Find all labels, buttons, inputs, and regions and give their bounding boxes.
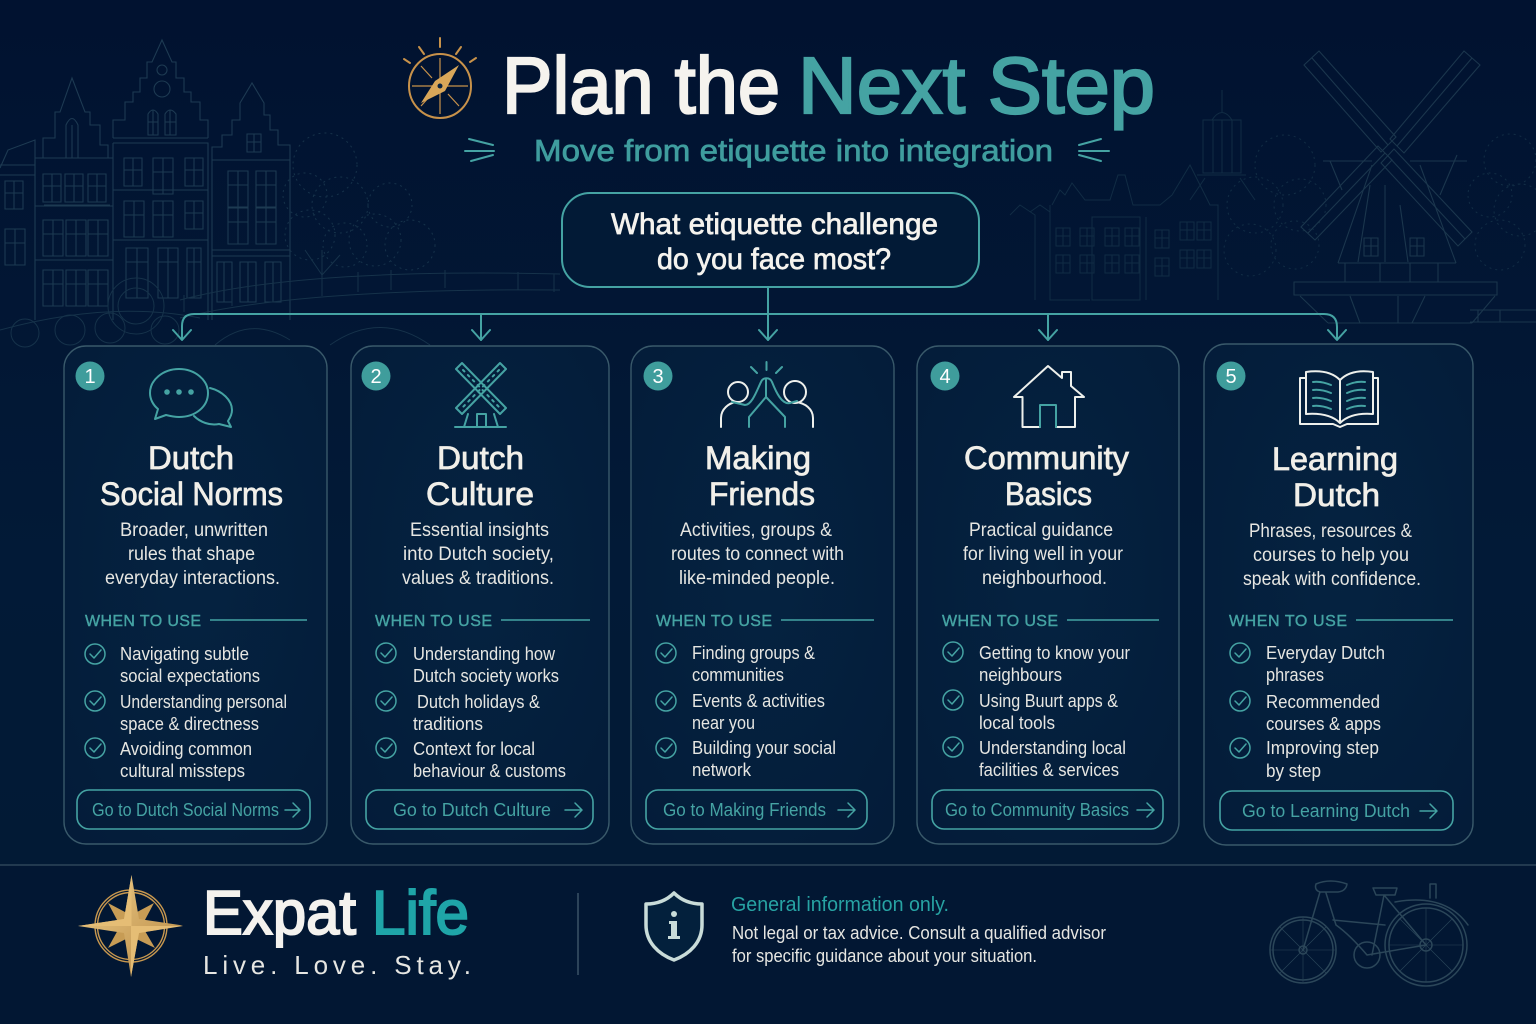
checklist: Using Buurt apps & <box>979 691 1118 711</box>
panel: card 2 Dutch Culture <box>351 346 609 844</box>
background: right trees <box>1224 134 1536 276</box>
title text: Next Step: Next Step <box>798 41 1155 130</box>
checklist: Recommended <box>1266 692 1380 712</box>
number badge 2 <box>362 362 390 390</box>
footer <box>0 865 1536 1024</box>
checklist <box>376 643 566 781</box>
card description: courses to help you <box>1253 544 1409 566</box>
disclaimer text <box>731 894 1106 966</box>
checklist: Navigating subtle <box>120 644 249 664</box>
number badge 3: 3 <box>652 366 664 388</box>
card heading: Social Norms <box>100 476 283 512</box>
card description: routes to connect with <box>671 543 844 565</box>
button <box>932 790 1163 829</box>
card heading: Basics <box>1005 476 1092 512</box>
subtitle: Move from etiquette into integration <box>534 133 1053 168</box>
question box <box>562 193 979 287</box>
button <box>366 790 593 829</box>
card description <box>1243 520 1421 590</box>
checklist: neighbours <box>979 665 1062 685</box>
card heading <box>1272 441 1398 513</box>
checklist: Dutch holidays & <box>417 692 540 712</box>
card heading: Culture <box>426 476 534 512</box>
checklist <box>943 642 1130 780</box>
when to use heading: WHEN TO USE <box>1229 613 1347 630</box>
checklist: Understanding personal <box>120 692 287 712</box>
checklist: Events & activities <box>692 691 825 711</box>
checklist: near you <box>692 713 755 733</box>
logo: gold compass star <box>78 875 183 977</box>
card description: Activities, groups & <box>680 519 832 541</box>
disclaimer text: Not legal or tax advice. Consult a qualified advisor <box>732 923 1106 943</box>
checklist: behaviour & customs <box>413 761 566 781</box>
checklist: network <box>692 760 752 780</box>
card description <box>963 519 1123 589</box>
button: Go to Dutch Social Norms <box>92 800 279 820</box>
panel: card 1 Dutch Social Norms <box>64 346 327 844</box>
title text: Plan the: Plan the <box>502 41 780 130</box>
checklist: Everyday Dutch <box>1266 643 1385 663</box>
disclaimer text: for specific guidance about your situation. <box>732 946 1037 966</box>
card heading <box>705 440 815 512</box>
number badge 5: 5 <box>1225 366 1237 388</box>
button: Go to Making Friends <box>663 800 826 820</box>
checklist: phrases <box>1266 665 1324 685</box>
background: canal houses line art <box>0 40 290 320</box>
icon: info shield <box>646 893 702 960</box>
number badge 1 <box>76 362 104 390</box>
checklist: Context for local <box>413 739 535 759</box>
icon: high five <box>721 362 813 427</box>
when to use heading: WHEN TO USE <box>85 613 201 630</box>
card description <box>105 519 280 589</box>
background: right town houses and church tower <box>1010 90 1255 300</box>
flourish left <box>465 139 494 161</box>
card description: for living well in your <box>963 543 1123 565</box>
card description: Broader, unwritten <box>120 519 268 541</box>
brand: Expat: Expat <box>203 879 356 948</box>
card description: neighbourhood. <box>982 567 1107 589</box>
button <box>646 790 867 829</box>
checklist: by step <box>1266 761 1321 781</box>
card description: everyday interactions. <box>105 567 280 589</box>
number badge 4 <box>930 362 960 390</box>
checklist: space & directness <box>120 714 259 734</box>
checklist: social expectations <box>120 666 260 686</box>
number badge 2: 2 <box>370 366 382 388</box>
checklist: Building your social <box>692 738 836 758</box>
number badge 1: 1 <box>84 366 96 388</box>
card heading <box>426 440 534 512</box>
disclaimer text: General information only. <box>731 894 949 916</box>
checklist <box>85 644 287 781</box>
icon: compass <box>404 38 476 118</box>
button <box>77 790 310 829</box>
checklist: Finding groups & <box>692 643 815 663</box>
background: left trees, bridge and bicycles <box>0 133 560 347</box>
checklist: Avoiding common <box>120 739 252 759</box>
card description: Phrases, resources & <box>1249 520 1412 542</box>
card heading <box>100 440 283 512</box>
checklist: Understanding local <box>979 738 1126 758</box>
card description: like-minded people. <box>679 567 835 589</box>
checklist <box>1230 643 1385 781</box>
card heading: Learning <box>1272 441 1398 477</box>
button: Go to Learning Dutch <box>1242 801 1410 821</box>
panel: card 5 Learning Dutch <box>1204 344 1473 845</box>
tagline: Live. Love. Stay. <box>203 950 471 980</box>
checklist: communities <box>692 665 784 685</box>
when to use heading: WHEN TO USE <box>942 613 1058 630</box>
card description <box>671 519 844 589</box>
card description: speak with confidence. <box>1243 568 1421 590</box>
when to use heading: WHEN TO USE <box>375 613 492 630</box>
panel: card 3 Making Friends <box>631 346 894 844</box>
card heading: Community <box>964 440 1129 476</box>
icon: house <box>1014 366 1084 427</box>
question box: do you face most? <box>657 243 891 276</box>
card description: Essential insights <box>410 519 549 541</box>
number badge 4: 4 <box>939 366 951 388</box>
card description: rules that shape <box>128 543 255 565</box>
button: Go to Dutch Culture <box>393 800 551 820</box>
panel: card 4 Community Basics <box>917 346 1179 844</box>
card heading: Friends <box>709 476 815 512</box>
button <box>1220 791 1453 830</box>
icon: faint bicycle <box>1270 881 1468 986</box>
card heading: Dutch <box>1293 477 1380 513</box>
checklist: Getting to know your <box>979 643 1130 663</box>
flourish right <box>1079 139 1109 161</box>
checklist: cultural missteps <box>120 761 245 781</box>
connector arrows <box>173 288 1346 340</box>
card description: values & traditions. <box>402 567 554 589</box>
background: windmill <box>1294 51 1536 323</box>
checklist: Understanding how <box>413 644 556 664</box>
checklist: local tools <box>979 713 1055 733</box>
question box: What etiquette challenge <box>611 208 938 241</box>
title <box>404 38 1155 130</box>
checklist <box>656 643 836 780</box>
checklist: facilities & services <box>979 760 1119 780</box>
checklist: traditions <box>413 714 483 734</box>
button: Go to Community Basics <box>945 800 1129 820</box>
card heading <box>964 440 1129 512</box>
card heading: Dutch <box>437 440 524 476</box>
card description: Practical guidance <box>969 519 1113 541</box>
icon: windmill <box>455 363 506 427</box>
number badge 3 <box>644 362 672 390</box>
number badge 5 <box>1216 362 1246 390</box>
icon: open book <box>1300 371 1378 427</box>
card heading: Making <box>705 440 811 476</box>
card description: into Dutch society, <box>403 543 554 565</box>
card description <box>402 519 554 589</box>
checklist: courses & apps <box>1266 714 1381 734</box>
card heading: Dutch <box>148 440 234 476</box>
checklist: Improving step <box>1266 738 1379 758</box>
when to use heading: WHEN TO USE <box>656 613 772 630</box>
brand: Life: Life <box>372 879 469 948</box>
checklist: Dutch society works <box>413 666 559 686</box>
icon: chat bubbles <box>150 369 232 427</box>
